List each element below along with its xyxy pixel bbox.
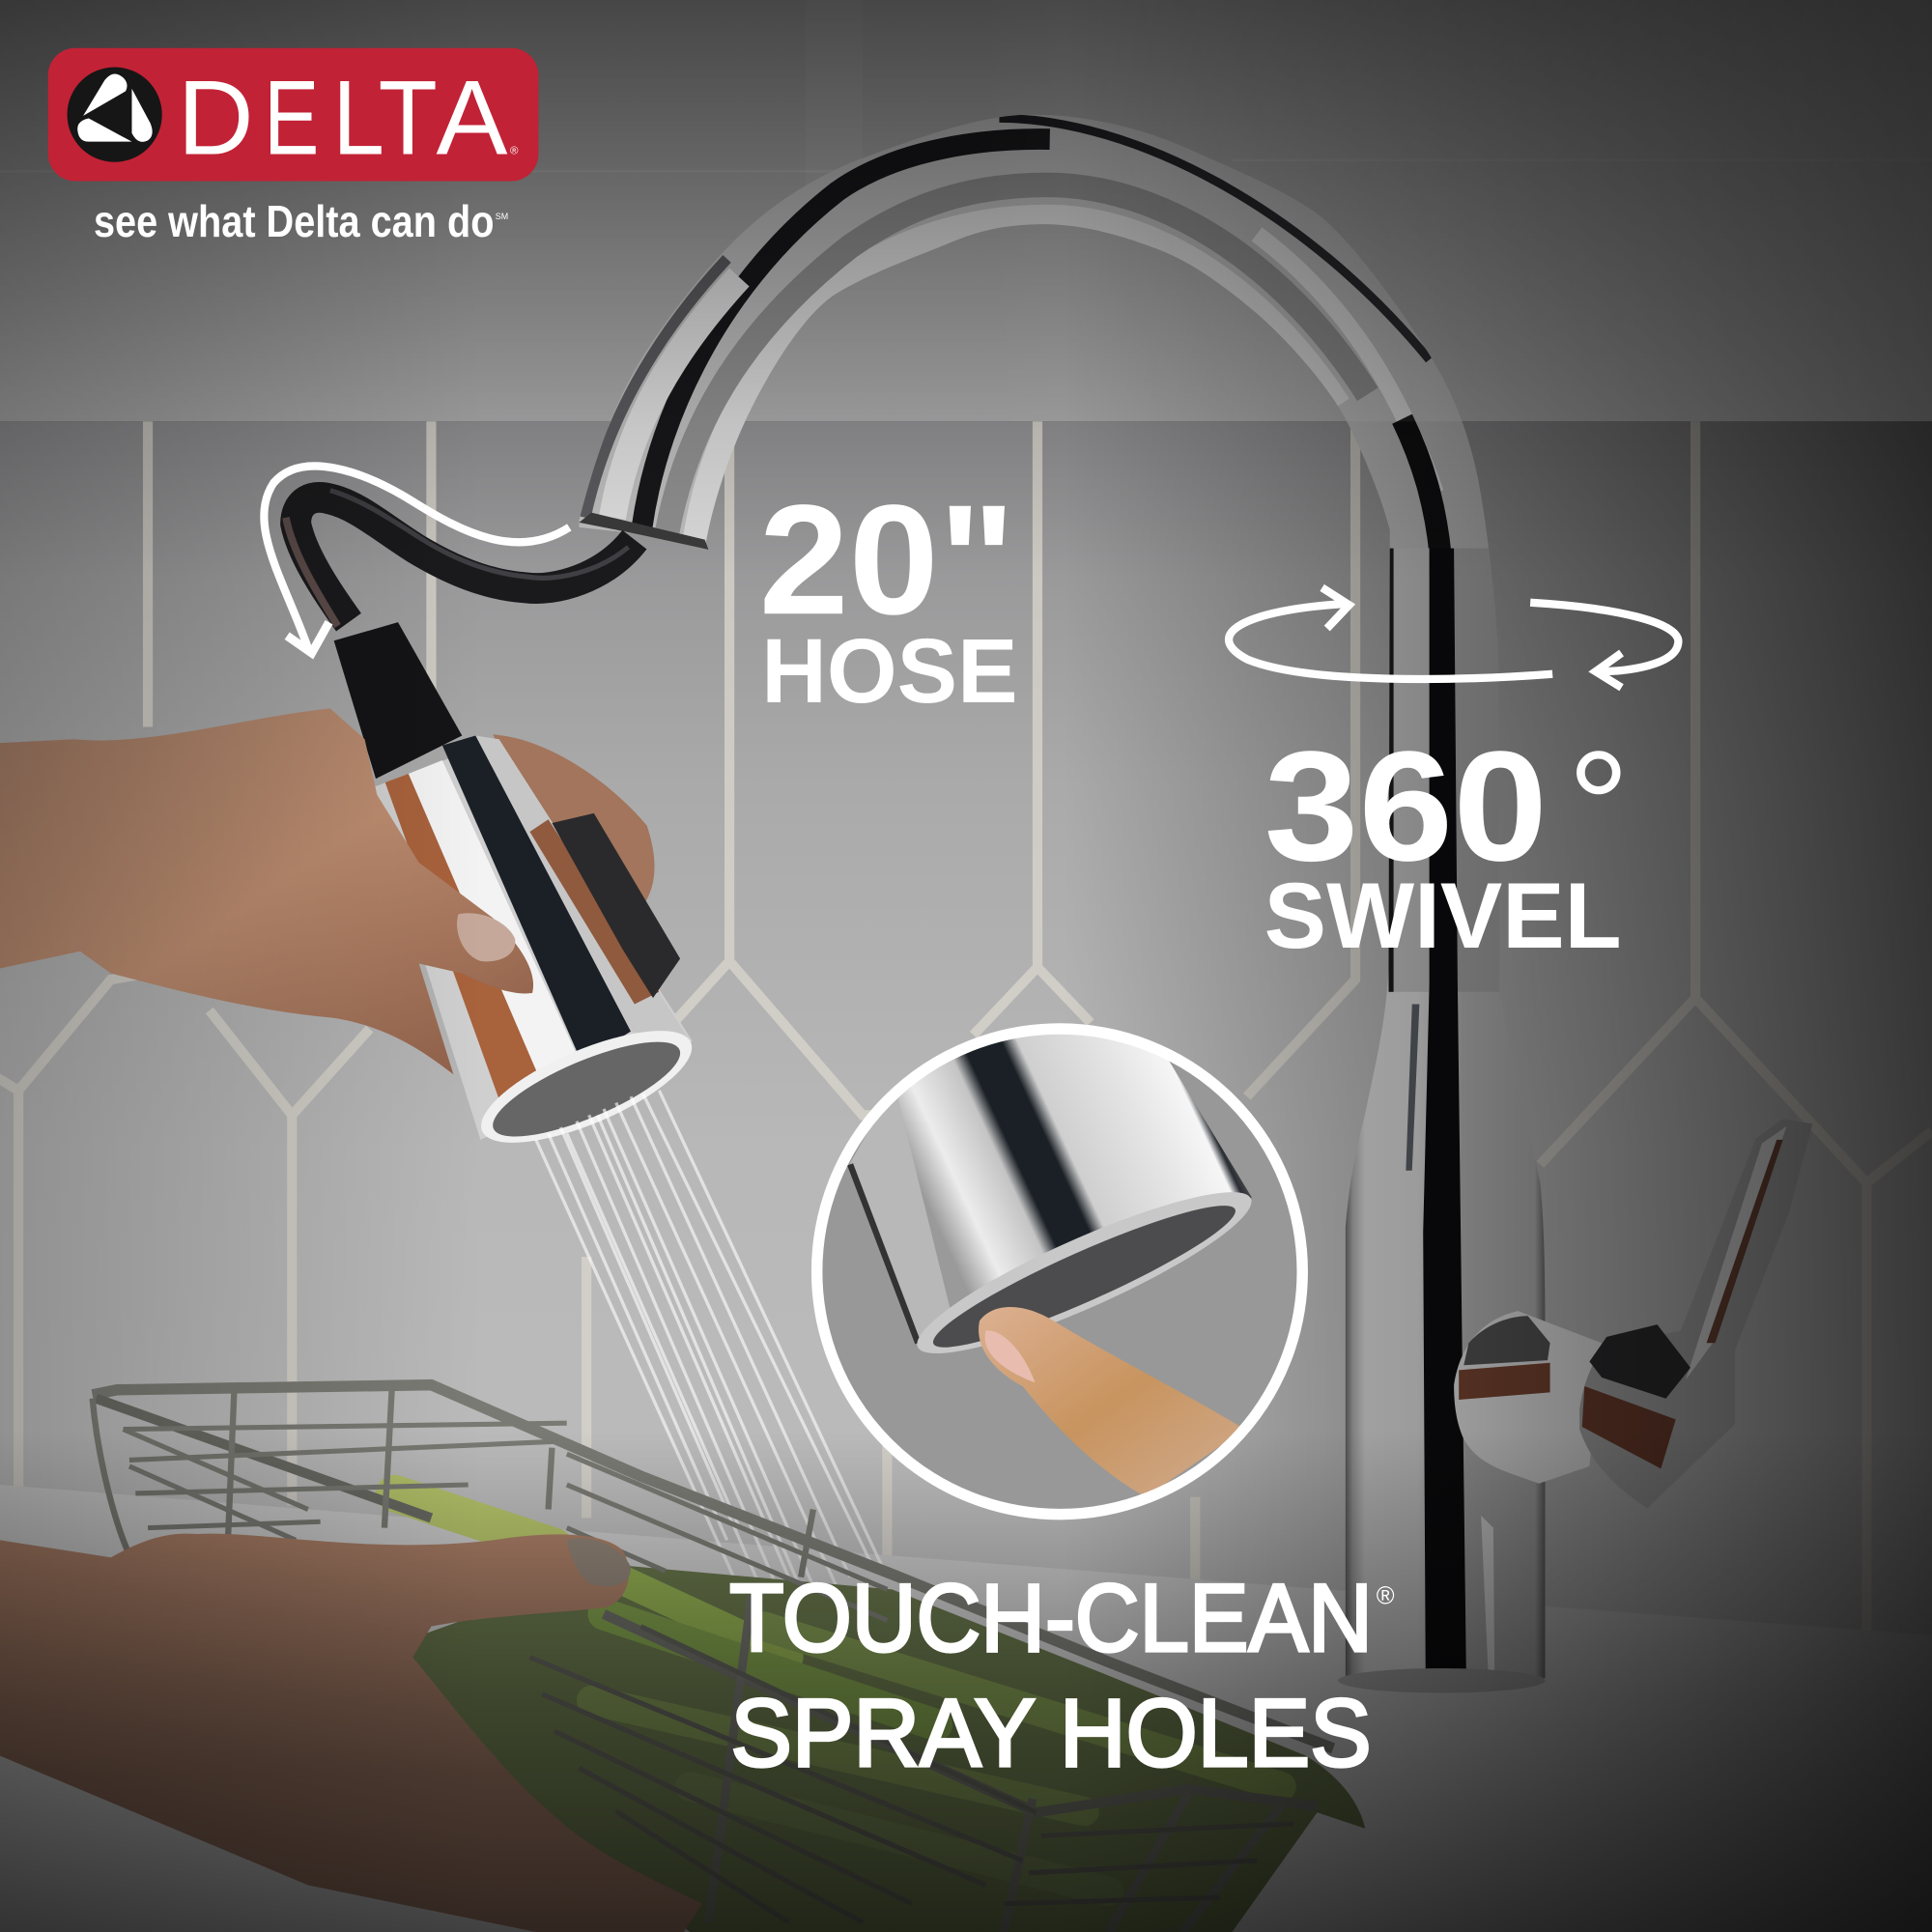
basket contents: asparagus	[394, 1493, 1365, 1932]
back fingers	[493, 734, 655, 906]
spray head	[370, 735, 705, 1165]
label: 360 degree swivel: °	[1567, 719, 1630, 894]
label: 360 degree swivel	[1264, 719, 1630, 968]
nozzle face	[917, 1192, 1252, 1353]
swivel arrow	[1229, 587, 1678, 688]
label: touch-clean spray holes: TOUCH-CLEAN	[729, 1565, 1373, 1672]
logo wordmark: L	[332, 59, 384, 177]
service mark: SM	[496, 212, 508, 221]
label: 20 inch hose	[759, 472, 1018, 723]
hose	[286, 491, 635, 626]
wire basket	[93, 1385, 1333, 1932]
hose collar	[334, 622, 462, 779]
logo wordmark: A	[437, 59, 508, 177]
base plate	[1338, 1668, 1545, 1693]
water spray	[536, 1091, 887, 1614]
circle ring	[817, 1029, 1302, 1515]
detail circle: touch-clean	[817, 1016, 1302, 1515]
countertop	[0, 1485, 1932, 1932]
logo wordmark: D	[178, 59, 254, 177]
tile backsplash	[0, 421, 1932, 1641]
logo wordmark: E	[264, 59, 319, 177]
label: touch-clean spray holes	[729, 1565, 1395, 1787]
upper wall	[0, 0, 1932, 421]
ribbed side	[850, 1098, 951, 1337]
logo wordmark: T	[379, 59, 438, 177]
logo red badge	[48, 48, 538, 181]
label: 360 degree swivel: SWIVEL	[1264, 863, 1622, 968]
logo	[48, 48, 538, 246]
spray button	[552, 813, 680, 998]
chrome nozzle	[898, 1034, 1252, 1308]
lower hand	[0, 1534, 702, 1932]
tagline: see what Delta can do	[94, 196, 494, 246]
label: touch-clean spray holes: ®	[1377, 1583, 1395, 1610]
registered mark: ®	[510, 145, 519, 156]
label: 20 inch hose: HOSE	[761, 621, 1018, 723]
label: 360 degree swivel: 360	[1264, 719, 1548, 894]
label: 20 inch hose: 20"	[759, 472, 1015, 647]
finger	[979, 1307, 1244, 1497]
label: touch-clean spray holes: SPRAY HOLES	[730, 1680, 1372, 1787]
hose arrow	[264, 466, 569, 653]
spout outlet	[579, 513, 708, 550]
thumbnail lower hand	[567, 1538, 631, 1586]
faucet	[542, 74, 1812, 1700]
upper hand	[0, 708, 533, 1074]
handle	[1454, 1119, 1812, 1508]
logo emblem	[68, 68, 162, 162]
